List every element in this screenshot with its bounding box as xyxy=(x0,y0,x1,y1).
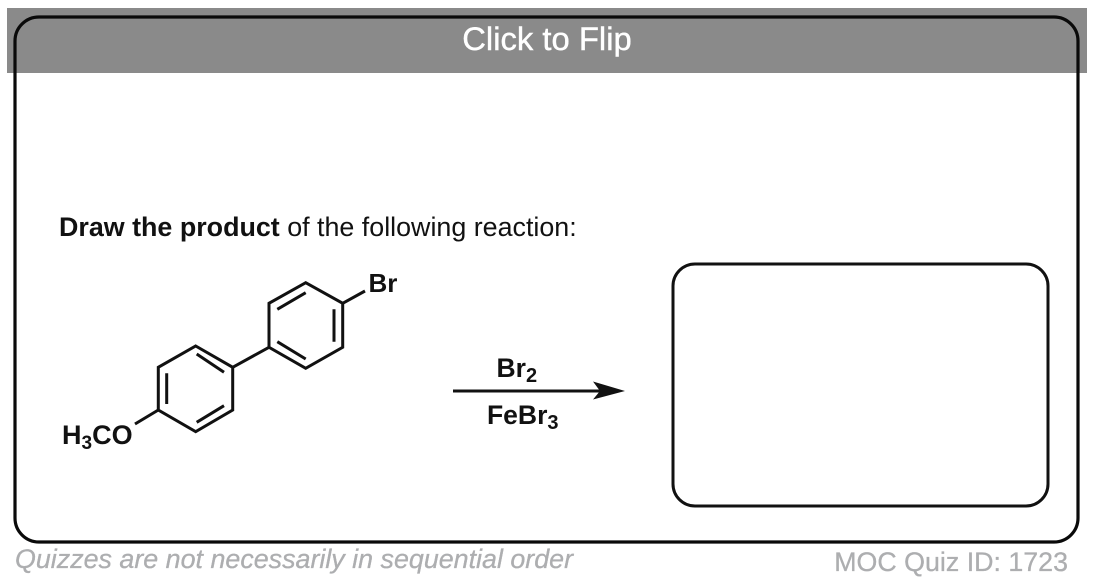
connecting bonds xyxy=(135,291,365,424)
reagent: FeBr3: FeBr xyxy=(487,400,547,430)
reaction arrow with reagents xyxy=(453,353,625,434)
label: Br substituent: Br xyxy=(368,268,397,298)
lower-left benzene ring xyxy=(158,346,233,432)
reagent: Br2: 2 xyxy=(526,365,537,387)
reagent: Br2: Br xyxy=(496,353,526,383)
label: methoxy substituent: H xyxy=(62,420,82,450)
question prompt: Draw the product of the following reaction: xyxy=(59,212,577,242)
label: methoxy substituent: 3 xyxy=(82,433,92,454)
arrow xyxy=(453,382,625,400)
label: methoxy substituent: CO xyxy=(92,420,133,450)
footer note: quiz id: MOC Quiz ID: 1723 xyxy=(834,547,1068,577)
reactant molecule: 4-bromo-4'-methoxybiphenyl xyxy=(62,268,397,454)
header band: click to flip: Click to Flip xyxy=(462,20,632,57)
answer box xyxy=(673,264,1048,506)
upper-right benzene ring xyxy=(269,283,343,368)
footer note: order disclaimer: Quizzes are not necessarily in sequential order xyxy=(15,544,574,574)
header band: click to flip xyxy=(7,8,1087,73)
reagent: FeBr3: 3 xyxy=(547,412,559,434)
